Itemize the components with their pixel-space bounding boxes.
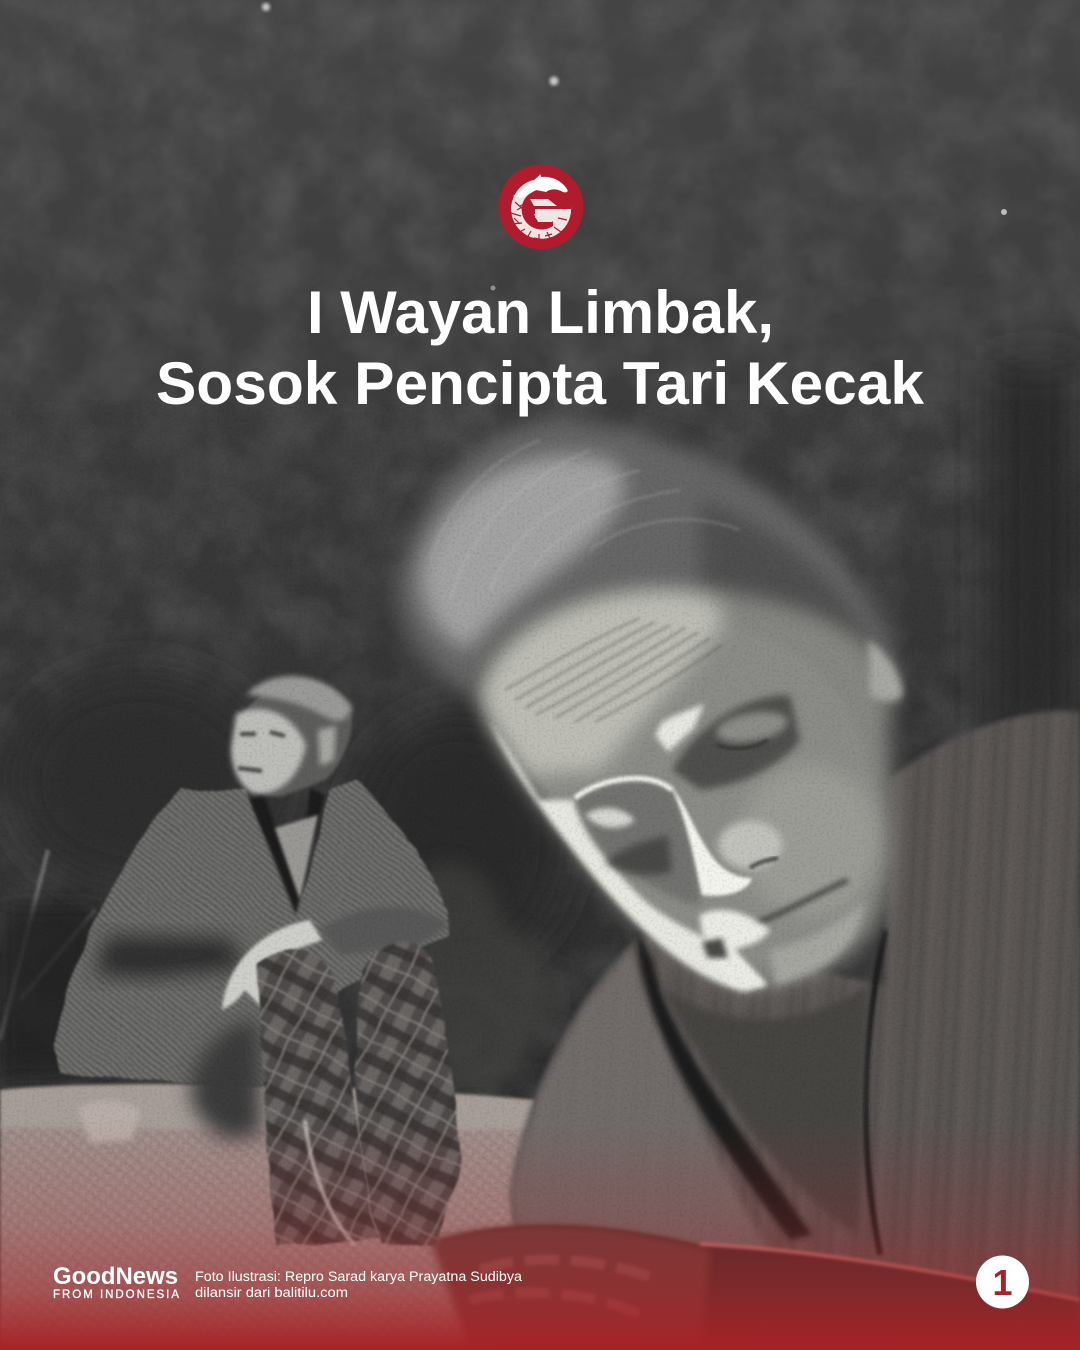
hair strands [430,440,740,600]
photo credit [195,1269,523,1300]
floor mat [0,1125,535,1350]
sarong legs [190,1020,262,1140]
page number badge [976,1256,1029,1308]
title [156,279,925,417]
lit edge of the face [490,720,768,992]
shrubs behind seated man [400,864,553,1090]
photo: large portrait of elderly man at right [398,420,1080,1350]
jacket [53,779,450,1085]
book at bottom [430,1225,1080,1350]
face [478,589,892,990]
right cheek [740,765,880,915]
nose highlight [670,785,752,896]
forehead highlight [482,591,723,775]
fine photographic noise [0,400,1080,1350]
title: Sosok Pencipta Tari Kecak [156,350,925,417]
photo: seated elderly man at left [0,676,553,1350]
logo [498,164,584,250]
robe [510,711,1080,1350]
brand: GoodNews from Indonesia: GoodNews [53,1263,178,1290]
forehead wrinkles [505,618,722,722]
mouth line [745,880,848,928]
title: I Wayan Limbak, [307,279,774,346]
photo credit: dilansir dari balitilu.com [195,1285,348,1300]
hand on knee [222,920,322,1010]
head [232,682,352,797]
red gradient overlay [0,1120,1080,1350]
left eye socket [575,781,700,905]
page number badge: 1 [992,1262,1013,1303]
hair [398,420,898,705]
right eye shadow and lid [672,695,800,790]
ear [868,640,903,701]
moustache and chin highlights [700,910,770,985]
photo credit: Foto Ilustrasi: Repro Sarad karya Prayatna Sudibya [195,1269,523,1284]
brand: GoodNews from Indonesia: FROM INDONESIA [53,1289,179,1301]
